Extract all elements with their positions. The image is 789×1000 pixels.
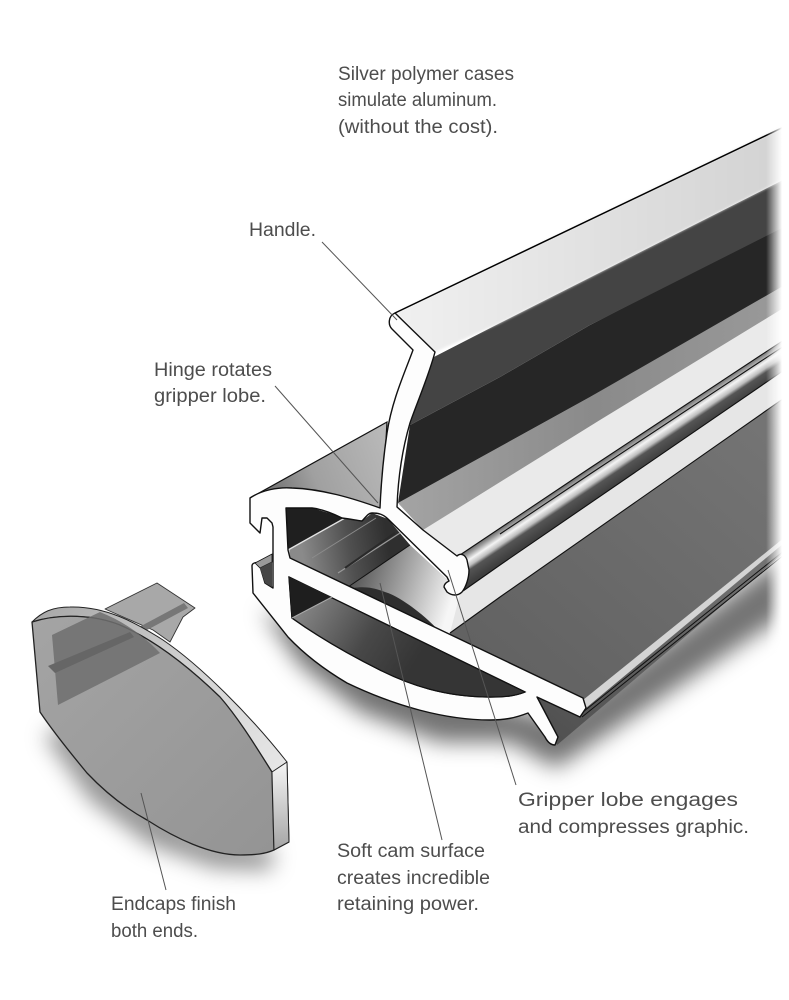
right edge cover: [782, 90, 789, 810]
endcap tab rib: [130, 603, 188, 637]
leader: gripper lobe: [448, 570, 516, 785]
leader: hinge: [275, 386, 378, 503]
label: silver polymer cases: Silver polymer cases: [338, 64, 514, 85]
fold highlight: [583, 533, 789, 708]
lower window highlight line: [292, 597, 332, 618]
drop shadow under endcap: [44, 725, 275, 870]
label: without the cost: (without the cost).: [338, 117, 498, 138]
band under gripper cylinder: [450, 366, 789, 633]
lower window fill: [289, 577, 525, 697]
shiny cavity lines: [288, 518, 400, 573]
leader: soft cam: [380, 583, 442, 840]
upper window mid tone: [286, 508, 410, 587]
endcap tab behind: [105, 583, 195, 642]
gripper cylinder: [457, 336, 789, 591]
endcap front face: [32, 616, 274, 855]
drop shadow under profile: [262, 555, 785, 768]
dark inner band: [398, 222, 789, 503]
see-through rib: [48, 632, 134, 673]
label: and compresses graphic: and compresses graphic.: [518, 817, 749, 838]
base top surface: [250, 422, 387, 510]
label: gripper lobe engages: Gripper lobe engages: [518, 790, 738, 811]
label: retaining power: retaining power.: [337, 894, 479, 915]
see-through tab: [52, 612, 160, 705]
dark upper cavity wedge: [286, 508, 346, 550]
gray band: [398, 280, 789, 530]
label: simulate aluminum: simulate aluminum.: [338, 90, 497, 111]
large lower panel: [440, 395, 789, 702]
medium dark band: [410, 176, 789, 425]
soft cam surface: [353, 587, 438, 630]
leader: handle: [322, 242, 397, 320]
gripper edge lines: [450, 366, 789, 633]
floor boundary line: [348, 545, 410, 587]
leader: endcap: [141, 793, 166, 890]
endcap: [32, 583, 289, 855]
lower window interior: [289, 577, 525, 697]
label: gripper lobe: gripper lobe.: [154, 386, 266, 407]
endcap side facet: [272, 762, 289, 850]
endcap rim: [32, 607, 289, 850]
label: handle: Handle.: [249, 220, 316, 241]
clip top surface: [255, 554, 272, 568]
right edge fade: [766, 90, 782, 810]
label: endcaps finish: Endcaps finish: [111, 894, 236, 915]
label: creates incredible: creates incredible: [337, 868, 490, 889]
handle light band: [395, 124, 789, 352]
extruded case body: [250, 124, 789, 745]
lower window dark corner: [289, 577, 332, 618]
label: hinge rotates: Hinge rotates: [154, 360, 272, 381]
lower clip surface: [255, 554, 272, 587]
gripper top lines: [457, 336, 789, 557]
label: soft cam surface: Soft cam surface: [337, 841, 485, 862]
label: both ends: both ends.: [111, 921, 198, 942]
white band above gripper: [423, 302, 789, 557]
fold edge lines: [582, 546, 789, 717]
white extrusion profile: [250, 313, 586, 745]
floor behind gripper: [348, 545, 462, 636]
lower flap: [530, 535, 789, 745]
handle top edge: [395, 124, 789, 313]
clip dark gap: [260, 562, 272, 587]
